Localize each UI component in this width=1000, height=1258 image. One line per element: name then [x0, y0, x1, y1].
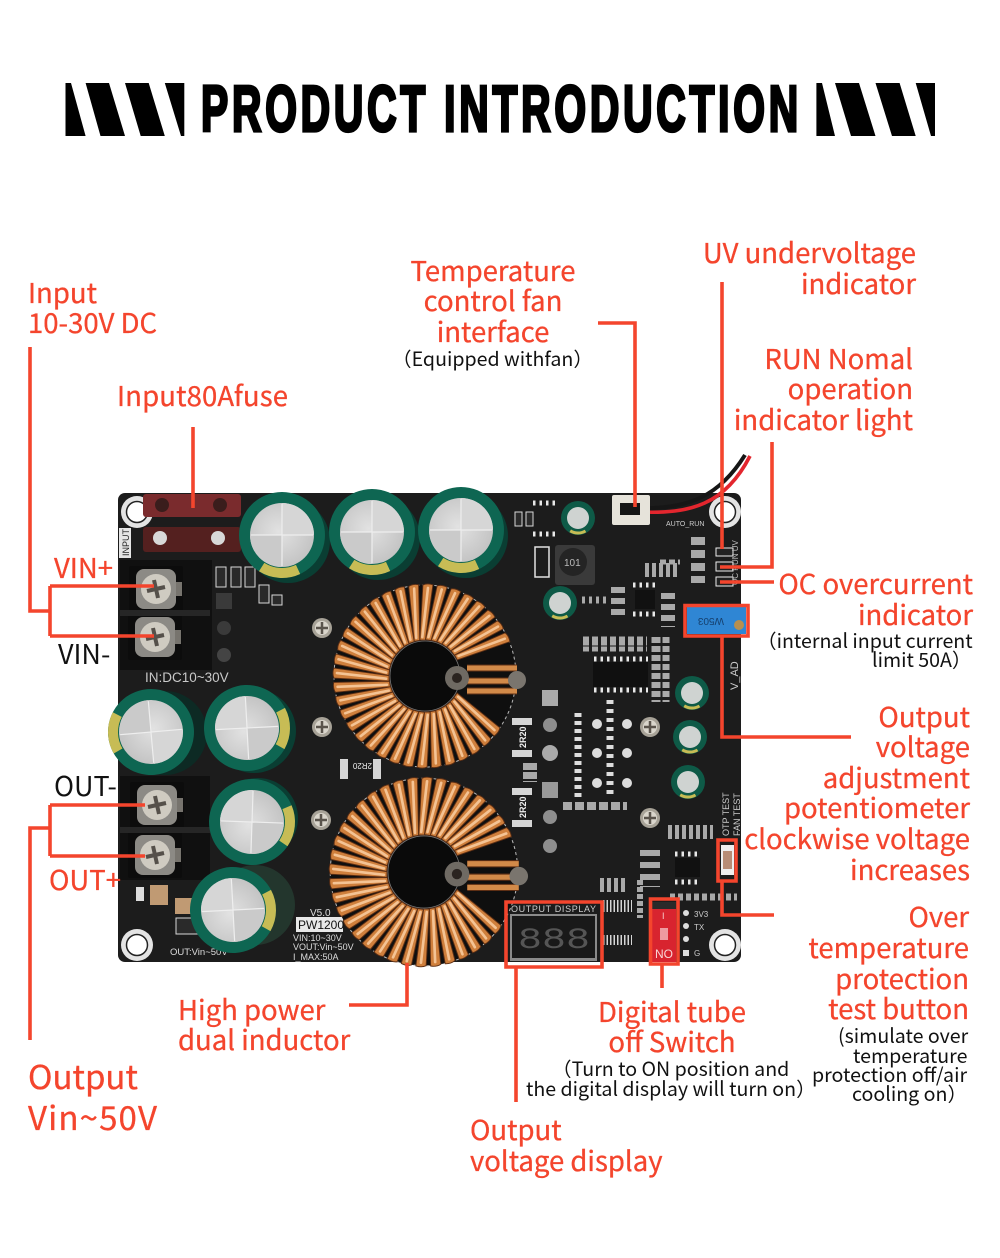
label: switch: Digital tube [598, 990, 746, 1030]
label: display: Output [470, 1108, 562, 1148]
label: OUT-: OUT- [54, 765, 117, 804]
label: switch: off Switch [608, 1020, 736, 1060]
callout line: potentiometer box [685, 606, 851, 737]
label: output: Output [28, 1051, 138, 1099]
label: UV: indicator [801, 262, 916, 302]
label: inductor: dual inductor [178, 1018, 351, 1058]
callout line: RUN [720, 442, 772, 567]
label: RUN: RUN Nomal [764, 337, 913, 377]
red DIP switch: I [662, 911, 665, 921]
small parts near terminals [136, 567, 282, 958]
digital display: OUTPUT DISPLAY [511, 904, 596, 914]
inductor: top toroid [333, 584, 526, 768]
mid screws [311, 618, 660, 830]
label: fan interface: control fan [424, 279, 562, 319]
top-right components: 101 [564, 558, 581, 569]
label: potentiometer: potentiometer [784, 786, 970, 826]
note: over temperature: (simulate over [838, 1020, 969, 1049]
mounting holes [121, 496, 741, 961]
silk labels right: TX [694, 923, 705, 932]
resistors 2R20: 2R20 [352, 761, 372, 770]
label: output: Vin~50V [28, 1092, 157, 1140]
digital display [510, 904, 597, 961]
silk labels right: OTP TEST [721, 792, 731, 836]
note: switch: the digital display will turn on） [526, 1073, 816, 1102]
resistors 2R20: 2R20 [518, 726, 528, 748]
label: over temperature: test button [828, 987, 969, 1027]
label: input: 10-30V DC [28, 301, 157, 341]
input terminal block [120, 560, 212, 670]
silk labels right: OC RUN UV [731, 539, 740, 585]
silk label: model: I_MAX:50A [293, 952, 339, 962]
red DIP switch [652, 902, 676, 962]
label: OC: indicator [858, 593, 973, 633]
icon: fuses [119, 494, 241, 558]
callout line: input [30, 347, 154, 636]
potentiometer [687, 607, 746, 634]
silk labels right: 3V3 [694, 910, 709, 919]
silk label: model: VOUT:Vin~50V [293, 942, 354, 952]
label: potentiometer: Output [878, 695, 970, 735]
label: potentiometer: voltage [876, 725, 970, 765]
output terminal block [120, 776, 210, 880]
top-right components: AUTO_RUN [666, 521, 704, 528]
label: OC: OC overcurrent [778, 562, 973, 602]
label: OUT+: OUT+ [49, 858, 121, 898]
resistors 2R20: 2R20 [518, 796, 528, 818]
label: UV: UV undervoltage [703, 231, 916, 271]
label: potentiometer: increases [850, 848, 970, 888]
potentiometer: W503 [697, 615, 724, 626]
label: potentiometer: adjustment [823, 756, 970, 796]
callout line: fan [598, 323, 635, 507]
silk label: model [293, 908, 354, 962]
callout line: output [30, 805, 145, 1040]
silk label: model: PW1200 [298, 918, 344, 932]
small parts near terminals: OUT:Vin~50V [170, 947, 228, 958]
note: over temperature: cooling on） [852, 1078, 967, 1107]
label: RUN: indicator light [734, 398, 913, 438]
note: OC: limit 50A） [872, 644, 972, 673]
callout line: OC [720, 580, 774, 584]
main control ICs and SMD clusters [530, 537, 737, 940]
callout line: inductor [349, 963, 407, 1005]
callout line: UV [720, 282, 724, 549]
small capacitors [668, 673, 712, 802]
icon: fuses: INPUT [121, 528, 131, 556]
label: fuse: Input80Afuse [117, 374, 288, 414]
callout line: test button [718, 840, 774, 915]
label: over temperature: temperature [808, 926, 969, 966]
silk labels right: V_AD [729, 661, 741, 690]
digital display: 888 [518, 924, 590, 958]
label: over temperature: Over [908, 895, 969, 935]
label: inductor: High power [178, 988, 326, 1028]
label: over temperature: protection [835, 957, 969, 997]
note: OC: （internal input current [757, 625, 973, 654]
label: RUN: operation [788, 367, 913, 407]
silk label: model: V5.0 [310, 908, 331, 919]
note: over temperature: protection off/air [812, 1059, 967, 1088]
silk labels right [683, 539, 742, 958]
panel: circuit board [96, 455, 750, 967]
silk label: model: VIN:10~30V [293, 933, 342, 943]
label: fan interface: Temperature [410, 249, 576, 289]
note: fan: （Equipped withfan） [392, 343, 593, 372]
silk labels right: G [694, 949, 700, 958]
label: potentiometer: clockwise voltage [744, 817, 970, 857]
icon: left stripes [66, 83, 184, 136]
LED indicators [716, 548, 733, 586]
label: display: voltage display [470, 1139, 663, 1179]
icon: fan wire and connector [612, 455, 750, 525]
red DIP switch: NO [655, 947, 673, 961]
silk label: input: IN:DC10~30V [145, 670, 229, 685]
callout line: DIP switch [650, 899, 678, 988]
label: VIN-: VIN- [58, 633, 110, 672]
button [721, 845, 734, 875]
capacitors [96, 480, 511, 963]
label: input: Input [28, 271, 97, 311]
resistors 2R20 [340, 718, 532, 827]
label: VIN+: VIN+ [54, 546, 113, 586]
callout line: display [506, 902, 602, 1102]
title [66, 72, 935, 145]
callout line: fuse [191, 427, 195, 508]
icon: right stripes [816, 83, 935, 136]
top-right components [515, 498, 704, 623]
note: switch: （Turn to ON position and [552, 1053, 789, 1082]
note: over temperature: temperature [853, 1040, 968, 1069]
label: fan interface: interface [437, 310, 549, 350]
silk labels right: FAN TEST [732, 793, 742, 836]
inductor: bottom toroid [329, 777, 528, 967]
